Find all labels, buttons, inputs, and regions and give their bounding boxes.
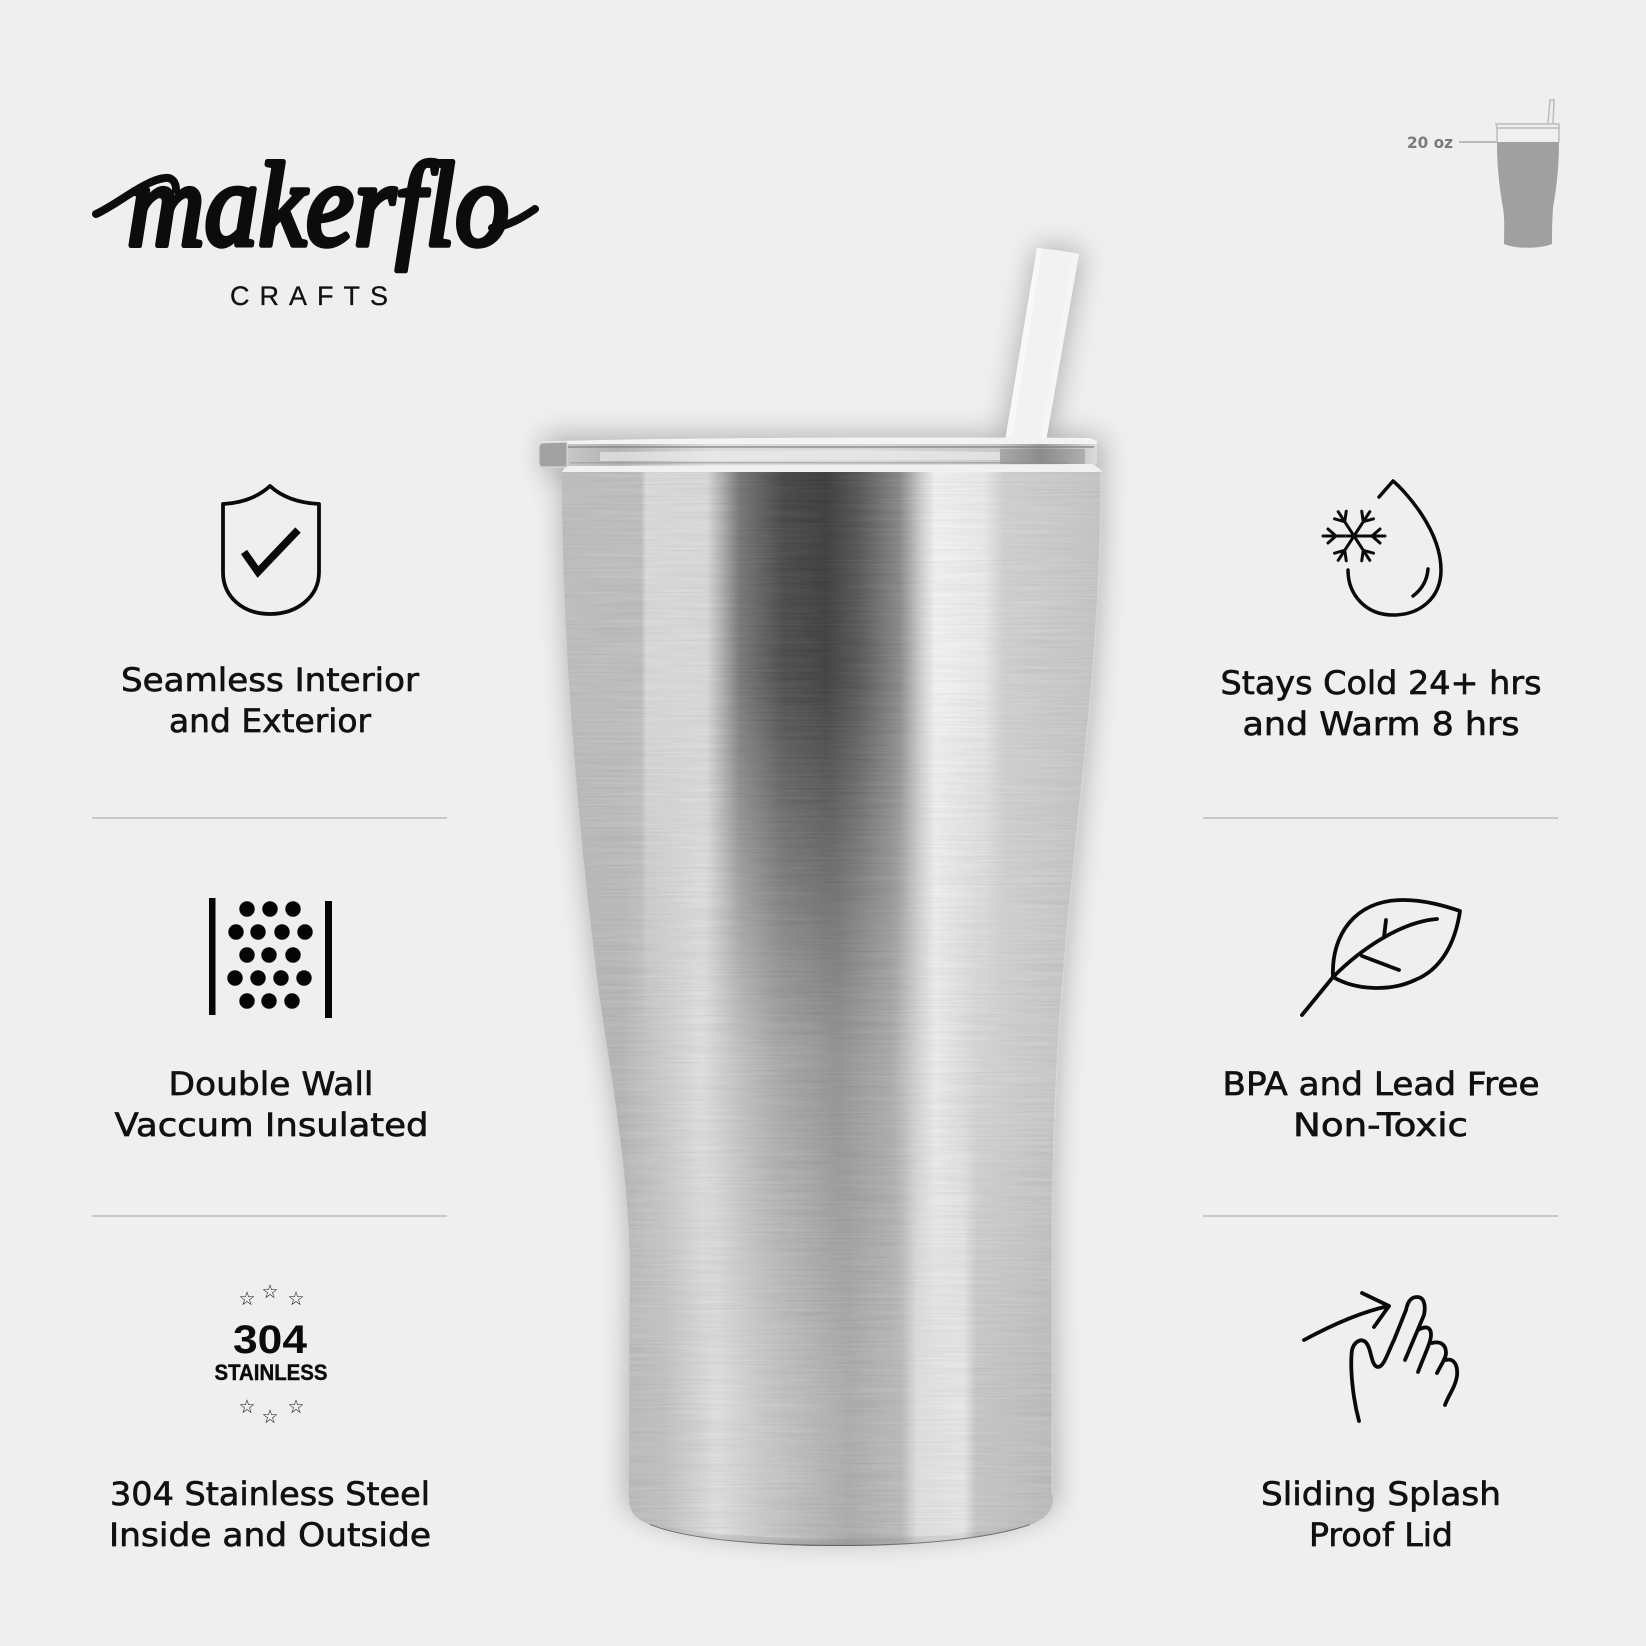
- feature: 304 stainless steel: [109, 1281, 431, 1554]
- badge stars: ☆: [238, 1288, 256, 1310]
- straw: [1005, 248, 1079, 441]
- icon: wall with dots: [209, 898, 332, 1018]
- feature: seamless interior and exterior: [121, 486, 420, 740]
- feature text: [109, 1475, 431, 1554]
- feature text: and Exterior: [169, 702, 372, 740]
- icon: shield with check: [223, 486, 319, 614]
- feature text: 304 Stainless Steel: [110, 1475, 430, 1513]
- feature text: Inside and Outside: [109, 1516, 431, 1554]
- tumbler body: [540, 460, 1120, 1560]
- feature: double wall vacuum insulated: [114, 898, 428, 1144]
- tumbler: [539, 246, 1120, 1560]
- feature text: Non-Toxic: [1293, 1106, 1468, 1144]
- feature text: Vaccum Insulated: [114, 1106, 428, 1144]
- badge stars: [238, 1281, 305, 1428]
- feature text: Proof Lid: [1309, 1516, 1453, 1554]
- icon: leaf: [1302, 900, 1460, 1015]
- badge stars: ☆: [238, 1396, 256, 1418]
- feature text: [1220, 664, 1542, 743]
- tumbler drop shadow: [544, 246, 1102, 1540]
- badge stars: ☆: [261, 1281, 279, 1303]
- size indicator: 20 oz: [1407, 100, 1559, 248]
- feature text: and Warm 8 hrs: [1242, 705, 1520, 743]
- sliding lid: [539, 437, 1102, 472]
- feature text: [121, 661, 420, 740]
- feature text: BPA and Lead Free: [1222, 1065, 1540, 1103]
- feature text: [1261, 1475, 1501, 1554]
- logo: makerflo crafts: [96, 138, 535, 311]
- badge stars: ☆: [287, 1396, 305, 1418]
- feature: sliding splash proof lid: [1261, 1293, 1501, 1554]
- feature text: Sliding Splash: [1261, 1475, 1501, 1513]
- feature: bpa and lead free: [1222, 900, 1540, 1144]
- badge stars: ☆: [261, 1406, 279, 1428]
- mini tumbler outline: [1496, 100, 1559, 142]
- badge stars: ☆: [287, 1288, 305, 1310]
- mini tumbler fill: [1497, 142, 1559, 248]
- feature text: Double Wall: [168, 1065, 374, 1103]
- size label: 20 oz: [1407, 133, 1453, 152]
- badge word: STAINLESS: [214, 1360, 328, 1385]
- icon: swipe hand with arrow: [1304, 1293, 1457, 1421]
- feature text: [1222, 1065, 1540, 1144]
- feature text: Stays Cold 24+ hrs: [1220, 664, 1542, 702]
- size leader line: [1459, 141, 1497, 143]
- badge number: 304: [233, 1318, 308, 1362]
- feature text: [114, 1065, 428, 1144]
- feature text: Seamless Interior: [121, 661, 420, 699]
- logo swashes: [96, 178, 535, 228]
- logo wordmark: makerflo: [127, 138, 509, 271]
- logo subtitle: CRAFTS: [230, 281, 388, 311]
- icon: 304 stainless badge: [214, 1281, 328, 1428]
- feature: stays cold and warm: [1220, 481, 1542, 743]
- icon: drop with snowflake: [1323, 481, 1441, 615]
